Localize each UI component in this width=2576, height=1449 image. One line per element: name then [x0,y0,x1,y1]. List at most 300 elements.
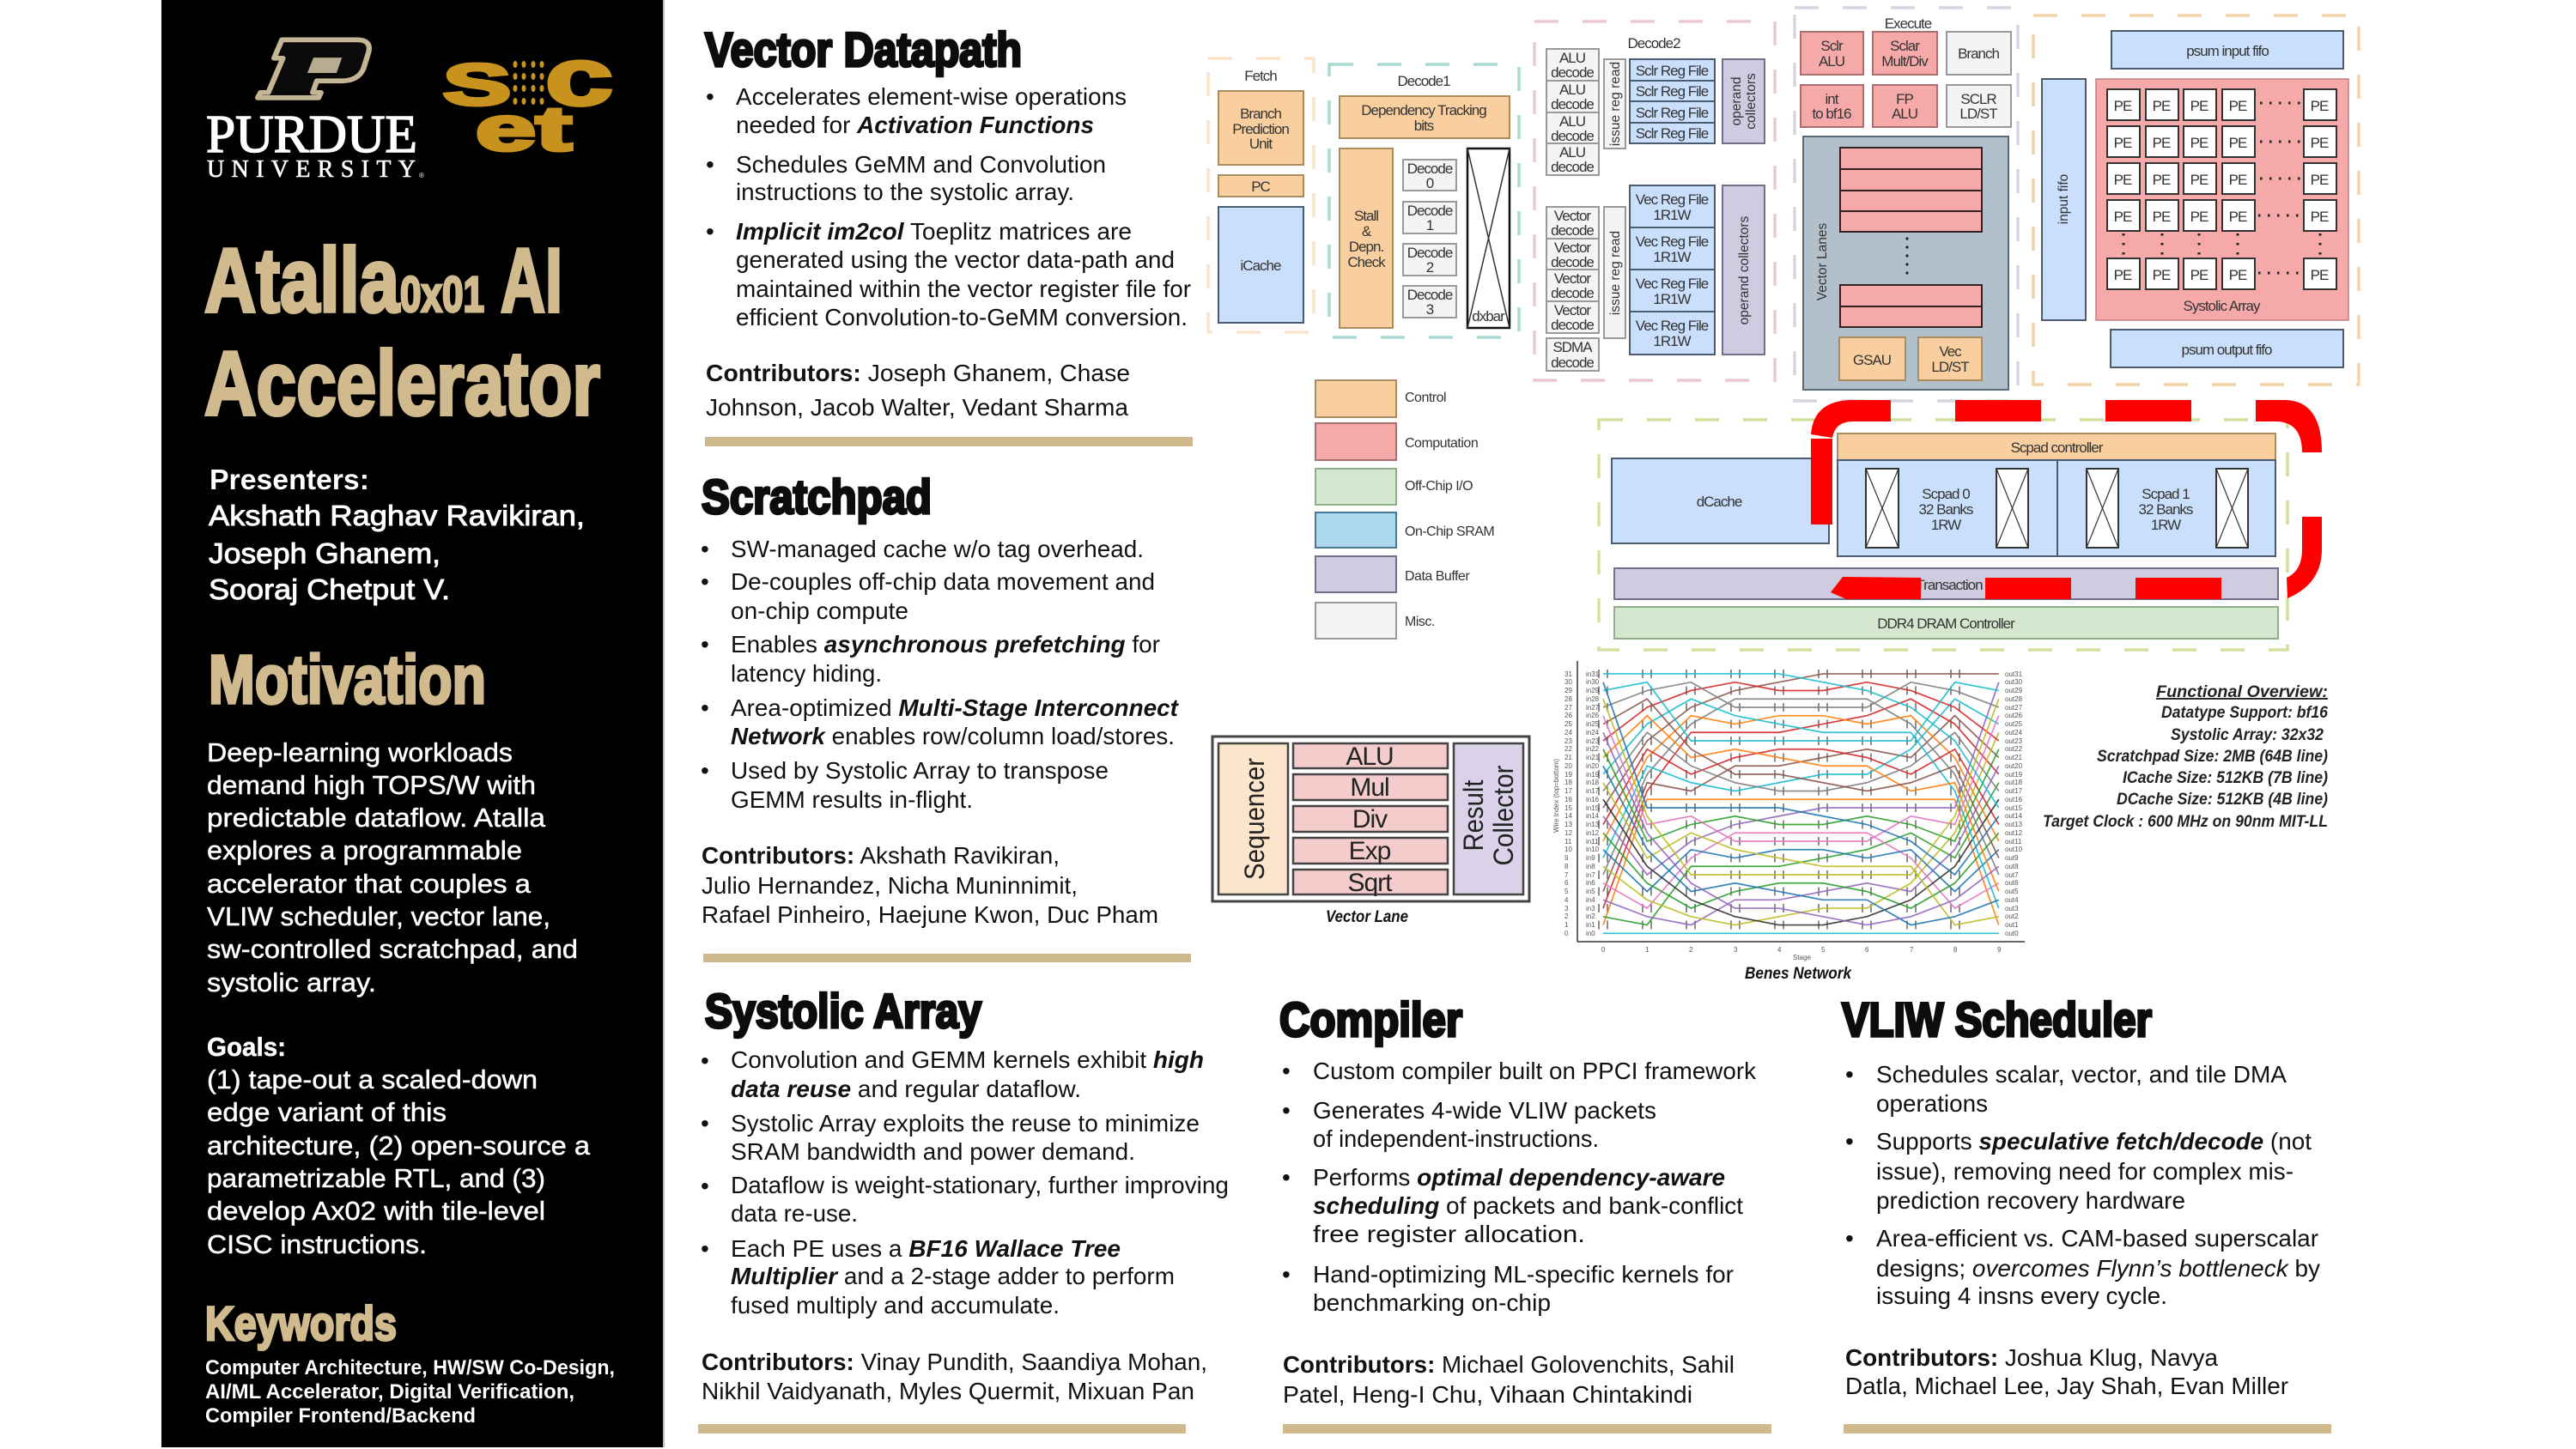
block: PE grid: Systolic Array [2184,298,2261,314]
chart labels: wire and stage ticks: out2 [2005,912,2019,920]
chart labels: wire and stage ticks: 1 [1564,921,1569,929]
presenters: Joseph Ghanem, [209,537,440,569]
block: Result Collector: Result [1458,779,1489,852]
block: dCache [1612,458,1829,543]
blocks: Decode 0 to 3: Decode [1407,287,1453,303]
chart labels: wire and stage ticks: in1 [1586,921,1595,929]
chart labels: wire and stage ticks: 8 [1564,863,1569,870]
block: Scpad 0 [1838,460,2057,556]
text: goals: edge variant of this [207,1097,447,1127]
chart labels: wire and stage ticks: 11 [1564,838,1572,846]
diagram: Decode2 stage [1534,21,1775,380]
diagram: Decode1 stage [1329,64,1519,337]
chart labels: wire and stage ticks: 2 [1564,912,1569,920]
blocks: Vec Reg File: 1R1W [1653,333,1692,349]
block: PE grid: PE [2229,172,2247,188]
logo text: Purdue University: ® [419,172,424,179]
chart labels: wire and stage ticks: 3 [1734,946,1738,954]
text: Systolic Array bullets: Convolution and GEMM kernels exhibit high [731,1046,1204,1073]
text: goals: architecture, (2) open-source a [207,1131,591,1161]
text: Vector Datapath bullets: • [706,151,714,178]
chart labels: wire and stage ticks: 5 [1564,888,1569,895]
block: PC: PC [1251,179,1271,195]
blocks: Sclr Reg File [1630,59,1715,143]
block: PE grid: PE [2114,209,2132,225]
chart labels: wire and stage ticks: 28 [1564,695,1572,703]
chart labels: wire and stage ticks: out5 [2005,888,2019,895]
blocks: scalar execution units: SCLR [1960,91,1996,107]
blocks: Vec Reg File: 1R1W [1653,207,1692,223]
block: Scpad 1 [2057,460,2275,556]
blocks: ALU Mul Div Exp Sqrt: Div [1352,805,1388,834]
chart labels: wire and stage ticks: in10 [1586,846,1600,853]
chart labels: wire and stage ticks: 16 [1564,796,1572,803]
text: keywords list: Computer Architecture, HW/SW Co-Design, [205,1356,615,1379]
blocks: Vec Reg File: Vec Reg File [1636,276,1709,292]
chart labels: wire and stage ticks: out30 [2005,678,2023,686]
chart labels: wire and stage ticks: in30 [1586,678,1600,686]
heading: Compiler: Compiler [1279,992,1462,1046]
text: goals [207,1032,591,1259]
chart labels: wire and stage ticks: out15 [2005,804,2023,812]
chart labels: wire and stage ticks: out6 [2005,879,2019,887]
legend: Data Buffer [1405,569,1470,584]
chart labels: wire and stage ticks: in27 [1586,704,1600,712]
chart labels: wire and stage ticks: in9 [1586,854,1595,862]
text: Vector Datapath bullets: maintained within the vector register file for [736,276,1191,302]
chart labels: wire and stage ticks: out22 [2005,745,2023,753]
block: PE grid: PE [2229,135,2247,151]
text: Functional Overview: Scratchpad Size: 2MB (64B line) [2097,748,2328,766]
text: Scratchpad bullets [701,536,1180,813]
text: Scratchpad bullets: Area-optimized Multi-Stage Interconnect [731,694,1180,721]
text: Vector Datapath contributors: Contributors: Joseph Ghanem, Chase [706,360,1130,386]
text: goals: Goals: [207,1032,286,1062]
block: Dependency Tracking bits [1340,96,1510,138]
text: VLIW Scheduler bullets: designs; overcomes Flynn’s bottleneck by [1876,1255,2320,1282]
chart labels: wire and stage ticks: out8 [2005,863,2019,870]
text: goals: (1) tape-out a scaled-down [207,1064,538,1094]
block: iCache [1218,207,1303,323]
title: Accelerator [204,333,600,434]
heading: Systolic Array: Systolic Array [705,984,981,1038]
chart labels: wire and stage ticks: out11 [2005,838,2022,846]
text: Vector Datapath bullets: generated using the vector data-path and [736,246,1175,273]
blocks: scalar execution units: Sclr [1820,38,1844,54]
chart labels: wire and stage ticks: 3 [1564,905,1569,912]
title: 0x01 [400,267,484,323]
chart labels: wire and stage ticks: in31 [1586,670,1600,678]
chart labels: wire and stage ticks: 27 [1564,704,1572,712]
blocks: ALU decode [1546,49,1599,175]
chart labels: wire and stage ticks: 6 [1865,946,1869,954]
blocks: Sclr Reg File: Sclr Reg File [1636,125,1709,142]
text: Vector Datapath bullets: Schedules GeMM and Convolution [736,151,1106,178]
block: PE grid: PE [2190,172,2208,188]
title: AI [501,230,562,331]
text: Compiler bullets: free register allocation. [1313,1221,1585,1247]
block: Scpad controller: Scpad controller [2011,440,2104,456]
blocks: Decode 0 to 3: 3 [1426,301,1434,318]
chart lines: wire paths [1603,674,1999,933]
block: PE grid: PE [2114,172,2132,188]
text: Systolic Array bullets: • [701,1235,709,1262]
block: PE grid: PE [2190,267,2208,283]
chart labels: wire and stage ticks: 6 [1564,879,1569,887]
text: VLIW Scheduler bullets: issue), removing need for complex mis- [1876,1158,2293,1185]
chart labels: wire and stage ticks: in20 [1586,762,1600,770]
chart labels: wire and stage ticks: 4 [1564,896,1569,904]
text: motivation body: sw-controlled scratchpad, and [207,934,578,964]
caption: Benes Network: Benes Network [1745,965,1852,983]
chart labels: wire and stage ticks: out18 [2005,779,2023,786]
chart labels: wire and stage ticks: 7 [1564,871,1569,879]
text: Compiler bullets: Custom compiler built on PPCI framework [1313,1058,1757,1084]
block: PE grid: PE [2153,172,2171,188]
blocks: ALU decode: ALU [1559,50,1585,66]
text: Compiler bullets: Performs optimal dependency-aware [1313,1164,1725,1191]
blocks: scalar execution units: Sclar [1890,38,1920,54]
text: VLIW Scheduler bullets: issuing 4 insns every cycle. [1876,1282,2167,1309]
text: VLIW Scheduler bullets: prediction recovery hardware [1876,1187,2185,1214]
blocks: ALU decode: ALU [1559,113,1585,130]
legend [1315,380,1494,639]
diagram: memory subsystem [1599,420,2287,650]
text: VLIW Scheduler bullets: • [1845,1128,1854,1155]
chart labels: wire and stage ticks: in28 [1586,695,1600,703]
block: transaction buffer [1614,568,2278,599]
block: Scpad 0: 1RW [1931,517,1961,533]
logo text: Purdue University: PURDUE [206,106,417,164]
text: Scratchpad bullets: GEMM results in-flight. [731,786,973,813]
block: input fifo [2042,79,2086,320]
block: operand collectors lower [1722,185,1765,355]
chart labels: wire and stage ticks: out17 [2005,787,2023,795]
chart labels: wire and stage ticks [1552,670,2023,961]
chart labels: wire and stage ticks: 17 [1564,787,1572,795]
chart labels: wire and stage ticks: in13 [1586,821,1600,828]
text: Systolic Array bullets: • [701,1173,709,1199]
presenters [209,464,585,605]
text: Scratchpad contributors: Contributors: Akshath Ravikiran, [702,842,1060,869]
block: Scpad 1: 1RW [2151,517,2181,533]
block: PE grid: PE [2229,267,2247,283]
panel: Vector Lanes: LD/ST [1931,359,1969,375]
blocks: Sclr Reg File: Sclr Reg File [1636,63,1709,79]
heading: Vector Datapath: Vector Datapath [705,22,1022,76]
block: Result Collector [1454,743,1523,894]
text: Scratchpad bullets: • [701,757,709,784]
blocks: ALU decode: decode [1551,96,1594,112]
block: PE grid: PE [2311,267,2329,283]
text: Systolic Array contributors: Contributors: Vinay Pundith, Saandiya Mohan, [702,1349,1207,1375]
text: Compiler contributors: Patel, Heng-I Chu, Vihaan Chintakindi [1283,1381,1692,1408]
logo: SoC et: et [476,95,572,164]
blocks: Vector and SDMA decode: decode [1551,285,1594,301]
block: DDR4 DRAM Controller: DDR4 DRAM Controller [1877,615,2015,632]
panel: Vector Datapath [705,22,1193,446]
text: VLIW Scheduler contributors [1845,1344,2288,1399]
chart labels: wire and stage ticks: in16 [1586,796,1600,803]
chart labels: wire and stage ticks: in25 [1586,720,1600,728]
text: Systolic Array bullets: data reuse and regular dataflow. [731,1076,1081,1102]
text: Compiler bullets: Generates 4-wide VLIW packets [1313,1097,1656,1124]
blocks: ALU decode: decode [1551,128,1594,144]
text: VLIW Scheduler bullets: operations [1876,1090,1988,1117]
blocks: Sclr Reg File: Sclr Reg File [1636,105,1709,121]
blocks: ALU Mul Div Exp Sqrt: Sqrt [1347,869,1393,897]
block: operand collectors upper: collectors [1744,73,1759,130]
chart labels: wire and stage ticks: out20 [2005,762,2023,770]
chart labels: wire and stage ticks: in4 [1586,896,1595,904]
blocks: Vec Reg File: 1R1W [1653,249,1692,265]
heading: VLIW Scheduler: VLIW Scheduler [1842,992,2152,1046]
text: Scratchpad bullets: SW-managed cache w/o tag overhead. [731,536,1144,562]
chart labels: wire and stage ticks: out25 [2005,720,2023,728]
chart labels: wire and stage ticks: out19 [2005,771,2023,779]
text: Vector Datapath bullets: efficient Convolution-to-GeMM conversion. [736,304,1188,330]
text: Systolic Array bullets: data re-use. [731,1200,858,1227]
block: dCache: dCache [1697,494,1742,510]
block: operand collectors lower: operand collectors [1737,215,1752,324]
chart labels: wire and stage ticks: 30 [1564,678,1572,686]
chart labels: wire and stage ticks: 14 [1564,812,1572,820]
block: psum output fifo [2111,330,2343,367]
text: goals: develop Ax02 with tile-level [207,1196,545,1226]
blocks: Sclr Reg File: Sclr Reg File [1636,83,1709,100]
text: motivation body: predictable dataflow. Atalla [207,803,546,833]
text: keywords list: Compiler Frontend/Backend [205,1404,476,1428]
chart labels: wire and stage ticks: out23 [2005,737,2023,745]
text: Systolic Array bullets: Dataflow is weight-stationary, further improving [731,1172,1229,1198]
text: VLIW Scheduler bullets: Schedules scalar, vector, and tile DMA [1876,1061,2287,1088]
block: issue reg read upper [1604,59,1625,149]
blocks: Decode 0 to 3: 2 [1426,259,1434,276]
chart labels: wire and stage ticks: out14 [2005,812,2023,820]
block: operand collectors upper [1722,59,1765,143]
callout: red dashed highlight around scratchpad [1811,400,2322,599]
chart labels: wire and stage ticks: out29 [2005,687,2023,694]
blocks: ALU Mul Div Exp Sqrt: ALU [1346,743,1394,771]
chart labels: wire and stage ticks: 26 [1564,712,1572,719]
blocks: Vector and SDMA decode: Vector [1554,302,1591,318]
chart labels: wire and stage ticks: in8 [1586,863,1595,870]
diagram: Execute stage [1795,8,2018,401]
text: motivation body: explores a programmable [207,835,522,865]
text: Scratchpad bullets: De-couples off-chip data movement and [731,568,1155,595]
block: Sequencer: Sequencer [1239,758,1270,880]
blocks: Decode 0 to 3: Decode [1407,203,1453,219]
text: Vector Datapath bullets: • [706,218,714,245]
block: issue reg read upper: issue reg read [1608,62,1623,146]
block: PC [1218,175,1303,197]
block: Branch Prediction Unit: Unit [1249,136,1273,152]
text: motivation body: accelerator that couples a [207,869,532,899]
chart labels: wire and stage ticks: 21 [1564,754,1572,761]
blocks: ALU decode: decode [1551,159,1594,175]
presenters: Sooraj Chetput V. [209,573,450,605]
text: Vector Datapath bullets [706,83,1191,330]
text: Compiler bullets: benchmarking on-chip [1313,1289,1551,1316]
text: Scratchpad bullets: • [701,694,709,721]
chart labels: wire and stage ticks: in14 [1586,812,1600,820]
chart labels: wire and stage ticks: in24 [1586,729,1600,737]
block: dxbar [1467,149,1510,328]
chart labels: wire and stage ticks: out0 [2005,930,2019,937]
text: Functional Overview: Systolic Array: 32x32 [2171,726,2324,744]
chart labels: wire and stage ticks: out21 [2005,754,2023,761]
panel: Vector Lanes [1803,136,2008,390]
blocks: scalar execution units [1801,32,2011,127]
text: Vector Datapath bullets: Accelerates element-wise operations [736,83,1127,110]
blocks: scalar execution units: to bf16 [1812,106,1851,122]
text: goals: CISC instructions. [207,1229,427,1259]
block: PE grid: PE [2114,267,2132,283]
chart labels: wire and stage ticks: 29 [1564,687,1572,694]
heading: Keywords: Keywords [205,1296,397,1350]
text: Compiler bullets: • [1282,1058,1291,1084]
chart labels: wire and stage ticks: 12 [1564,829,1572,837]
chart labels: wire and stage ticks: in22 [1586,745,1600,753]
chart labels: wire and stage ticks: in29 [1586,687,1600,694]
text: VLIW Scheduler bullets: Area-efficient vs. CAM-based superscalar [1876,1225,2318,1252]
block: PE grid: PE [2114,98,2132,114]
text: motivation body: VLIW scheduler, vector lane, [207,901,550,931]
block: Scpad 1: 32 Banks [2139,501,2193,518]
block: Scpad controller [1838,433,2275,460]
chart labels: wire and stage ticks: 19 [1564,771,1572,779]
diagram: Execute stage: Execute [1885,15,1932,32]
legend: On-Chip SRAM [1405,524,1494,539]
chart labels: wire and stage ticks: 0 [1601,946,1606,954]
text: Scratchpad bullets: • [701,631,709,658]
panel: Compiler [1279,992,1771,1434]
diagram: Decode2 stage: Decode2 [1627,35,1680,52]
text: Compiler bullets: • [1282,1164,1291,1191]
chart labels: wire and stage ticks: 8 [1953,946,1958,954]
block: Branch Prediction Unit: Branch [1240,106,1281,122]
text: Scratchpad bullets: on-chip compute [731,597,908,624]
chart labels: wire and stage ticks: out31 [2005,670,2023,678]
chart labels: wire and stage ticks: 9 [1564,854,1569,862]
block: Branch Prediction Unit [1218,91,1303,165]
chart labels: wire and stage ticks: 4 [1777,946,1782,954]
text: motivation body [207,737,578,997]
chart labels: wire and stage ticks: 20 [1564,762,1572,770]
text: Functional Overview: Datatype Support: bf16 [2161,704,2328,722]
block: PE grid: PE [2229,98,2247,114]
chart labels: wire and stage ticks: in0 [1586,930,1595,937]
chart labels: wire and stage ticks: out1 [2005,921,2019,929]
text: Systolic Array contributors [702,1349,1207,1404]
text: Compiler bullets: • [1282,1261,1291,1288]
chart labels: wire and stage ticks: 23 [1564,737,1572,745]
blocks: Vector and SDMA decode: Vector [1554,239,1591,256]
block: PE grid: PE [2190,209,2208,225]
block: Stall and Depn Check: & [1362,223,1372,239]
text: Vector Datapath contributors: Johnson, Jacob Walter, Vedant Sharma [706,394,1128,421]
blocks: Vector and SDMA decode: SDMA [1552,339,1593,355]
blocks: Vector and SDMA decode [1546,207,1599,371]
block: operand collectors upper: operand [1729,77,1744,125]
text: VLIW Scheduler bullets: • [1845,1225,1854,1252]
blocks: Decode 0 to 3: Decode [1407,245,1453,261]
chart labels: wire and stage ticks: in21 [1586,754,1600,761]
chart labels: wire and stage ticks: out9 [2005,854,2019,862]
block: PE grid: PE [2190,135,2208,151]
heading: Scratchpad: Scratchpad [702,470,932,524]
title [204,230,600,434]
blocks: ALU decode: ALU [1559,144,1585,161]
block: Scpad 1: Scpad 1 [2142,486,2190,502]
chart labels: wire and stage ticks: in23 [1586,737,1600,745]
text: Scratchpad contributors [702,842,1158,928]
chart labels: wire and stage ticks: out27 [2005,704,2023,712]
block: PE grid: PE [2311,209,2329,225]
block: Scpad 0: 32 Banks [1919,501,1973,518]
block: PE grid: PE [2153,267,2171,283]
block: PE grid: PE [2311,172,2329,188]
chart labels: wire and stage ticks: 1 [1645,946,1649,954]
blocks: scalar execution units: ALU [1892,106,1917,122]
block: Scpad 0: Scpad 0 [1922,486,1970,502]
caption: Vector Lane: Vector Lane [1326,908,1408,926]
text: Systolic Array bullets: • [701,1047,709,1074]
panel: Systolic Array [698,984,1229,1434]
chart labels: wire and stage ticks: in2 [1586,912,1595,920]
diagram: Fetch stage [1208,58,1314,332]
text: Compiler bullets: scheduling of packets and bank-conflict [1313,1192,1743,1219]
text: Systolic Array bullets: SRAM bandwidth and power demand. [731,1138,1135,1165]
blocks: Vector and SDMA decode: decode [1551,222,1594,239]
block: Sequencer [1218,743,1288,894]
panel: VLIW Scheduler [1842,992,2331,1434]
chart labels: wire and stage ticks: out28 [2005,695,2023,703]
block: PE grid: PE [2153,209,2171,225]
text: keywords list: AI/ML Accelerator, Digital Verification, [205,1380,574,1404]
chart: Benes Network [1552,661,2025,961]
blocks: Decode 0 to 3: 1 [1426,217,1434,233]
blocks: Vec Reg File: Vec Reg File [1636,318,1709,334]
panel: Scratchpad [701,470,1191,962]
chart labels: wire and stage ticks: 13 [1564,821,1572,828]
text: Vector Datapath bullets: instructions to the systolic array. [736,179,1074,205]
text: Compiler bullets: Hand-optimizing ML-specific kernels for [1313,1261,1734,1288]
text: Vector Datapath contributors [706,360,1130,421]
chart labels: wire and stage ticks: out4 [2005,896,2019,904]
legend: Off-Chip I/O [1405,479,1473,494]
block: iCache: iCache [1241,258,1281,274]
block: Branch Prediction Unit: Prediction [1232,121,1289,137]
blocks: Vector and SDMA decode: Vector [1554,270,1591,287]
legend: Control [1405,391,1446,405]
chart labels: wire and stage ticks: 5 [1821,946,1826,954]
logo: SoC et [443,32,613,164]
chart labels: wire and stage ticks: out7 [2005,871,2019,879]
block: Dependency Tracking bits: Dependency Tracking [1361,102,1486,118]
chart labels: wire and stage ticks: 7 [1910,946,1914,954]
text: Scratchpad bullets: Enables asynchronous prefetching for [731,631,1160,658]
chart labels: wire and stage ticks: in6 [1586,879,1595,887]
block: PE grid: PE [2153,135,2171,151]
blocks: scalar execution units: Mult/Div [1881,53,1929,70]
text: motivation body: systolic array. [207,967,376,997]
chart labels: wire and stage ticks: in18 [1586,779,1600,786]
text: Scratchpad bullets: latency hiding. [731,660,882,687]
blocks: Vector and SDMA decode: decode [1551,317,1594,333]
blocks: Decode 0 to 3: 0 [1426,175,1434,191]
block: psum input fifo [2111,31,2343,69]
